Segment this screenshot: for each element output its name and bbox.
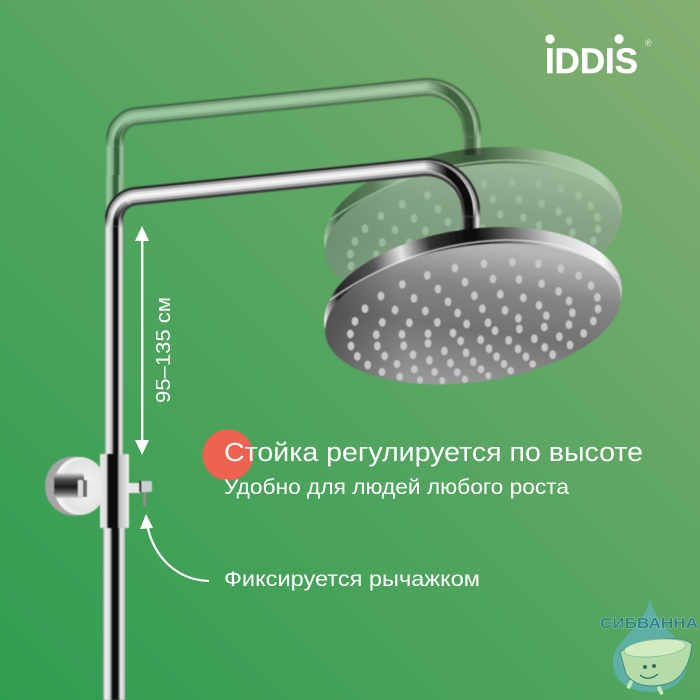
shower pipe (103, 159, 480, 700)
lever caption: Фиксируется рычажком (224, 568, 480, 591)
ghost shower arm (raised position) (106, 79, 481, 210)
subheading: Удобно для людей любого роста (224, 476, 569, 499)
curved arrow to lever (140, 514, 209, 581)
sliding collar with lever (100, 454, 152, 528)
sibvanna watermark: СИБВАННА (600, 615, 698, 632)
height arrow (135, 226, 149, 455)
heading: Стойка регулируется по высоте (224, 439, 643, 467)
ghost shower head (raised position) (314, 129, 632, 322)
water drop (613, 598, 687, 692)
shower head (314, 209, 632, 402)
wall mount (45, 456, 106, 516)
height label: 95–135 см (153, 297, 175, 403)
red accent circle (202, 430, 254, 480)
sibvanna watermark (600, 598, 698, 695)
iddis logo: IDDIS (545, 42, 638, 81)
iddis logo: ® (645, 38, 652, 48)
bathtub (620, 636, 692, 695)
